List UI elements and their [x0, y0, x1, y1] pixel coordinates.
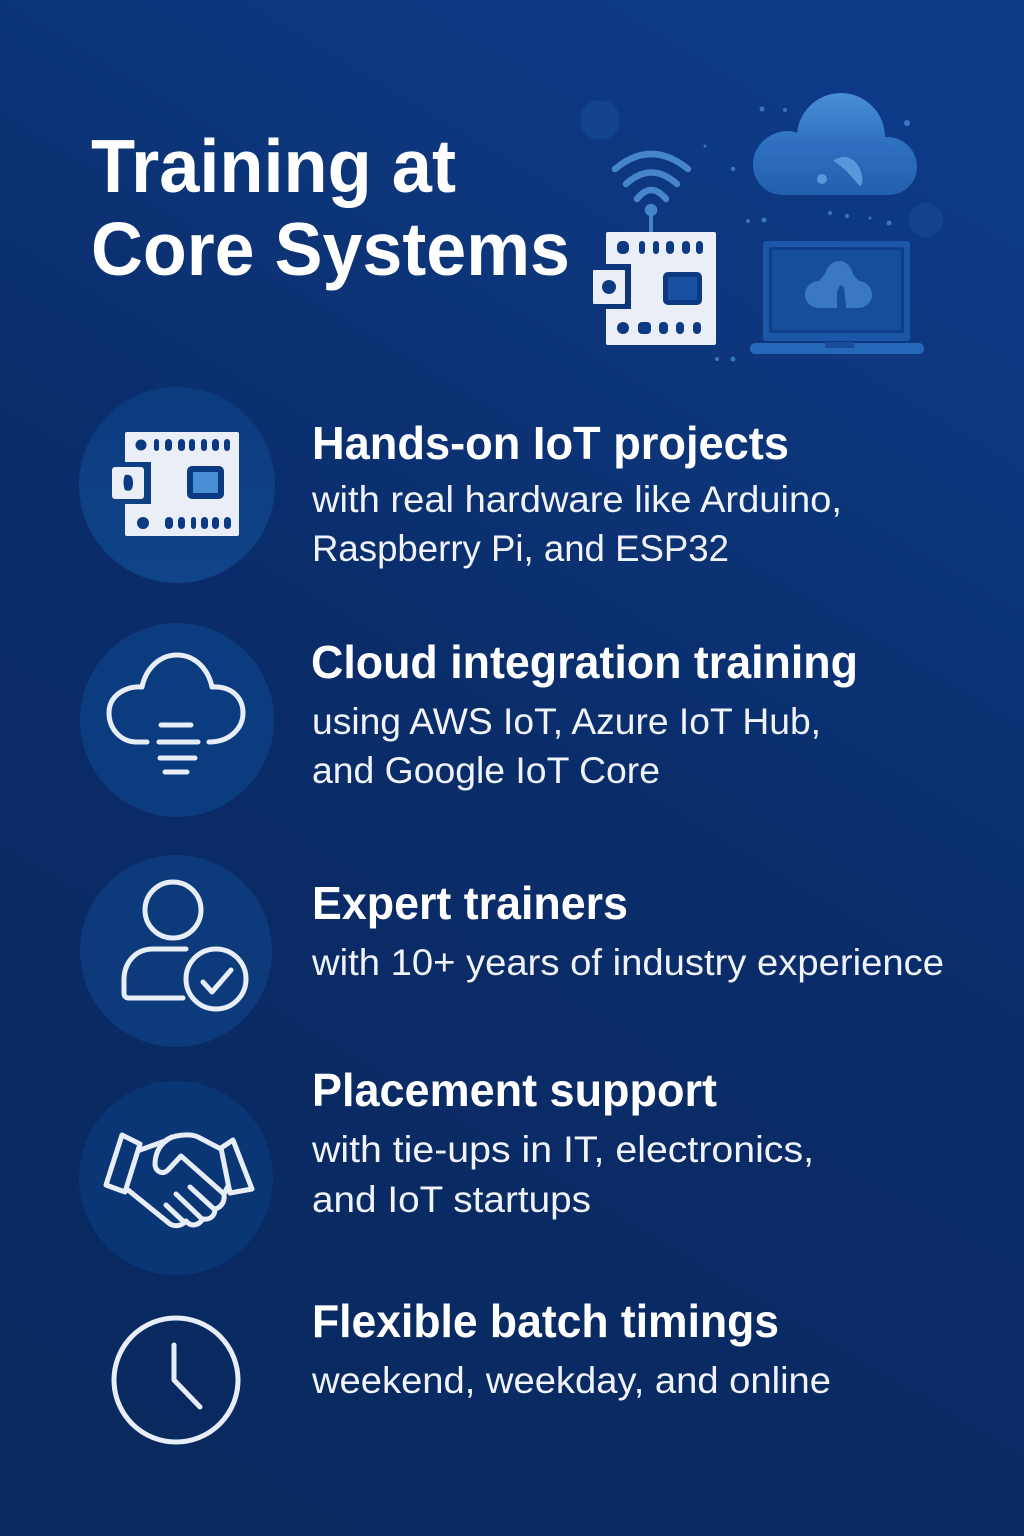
panel: cloud integration training [80, 623, 858, 817]
heading: Cloud integration training [311, 636, 858, 688]
panel: flexible batch timings [114, 1295, 831, 1442]
description: with real hardware like Arduino, [311, 479, 842, 520]
icon: clock [114, 1318, 238, 1442]
description: with tie-ups in IT, electronics, [311, 1129, 814, 1170]
illustration: IoT device, cloud and laptop [580, 93, 943, 362]
description: and Google IoT Core [312, 750, 660, 791]
heading: Placement support [312, 1064, 717, 1116]
decorative blob right [909, 203, 943, 237]
icon: circuit board in circle [79, 387, 275, 583]
title [91, 124, 570, 291]
specks [704, 106, 910, 362]
description: Raspberry Pi, and ESP32 [312, 528, 729, 569]
icon: person with check in circle [80, 855, 272, 1047]
icon: wifi signal [615, 154, 688, 232]
description: weekend, weekday, and online [311, 1360, 831, 1401]
title: Training at [91, 124, 456, 208]
panel: placement support [79, 1064, 814, 1275]
decorative blob left [580, 100, 620, 140]
description [311, 479, 842, 569]
icon: cloud [753, 93, 917, 195]
icon: circuit board [593, 232, 716, 345]
description: using AWS IoT, Azure IoT Hub, [312, 701, 821, 742]
description [312, 701, 821, 791]
heading: Hands-on IoT projects [312, 417, 789, 469]
title: Core Systems [91, 207, 570, 291]
heading: Expert trainers [312, 877, 628, 929]
icon: handshake in circle [79, 1081, 273, 1275]
panel: hands-on IoT projects [79, 387, 842, 583]
icon: laptop [750, 241, 924, 354]
heading: Flexible batch timings [312, 1295, 779, 1347]
icon: cloud in circle [80, 623, 274, 817]
description [311, 1129, 814, 1220]
panel: expert trainers [80, 855, 944, 1047]
description: and IoT startups [312, 1179, 591, 1220]
description: with 10+ years of industry experience [311, 942, 944, 983]
